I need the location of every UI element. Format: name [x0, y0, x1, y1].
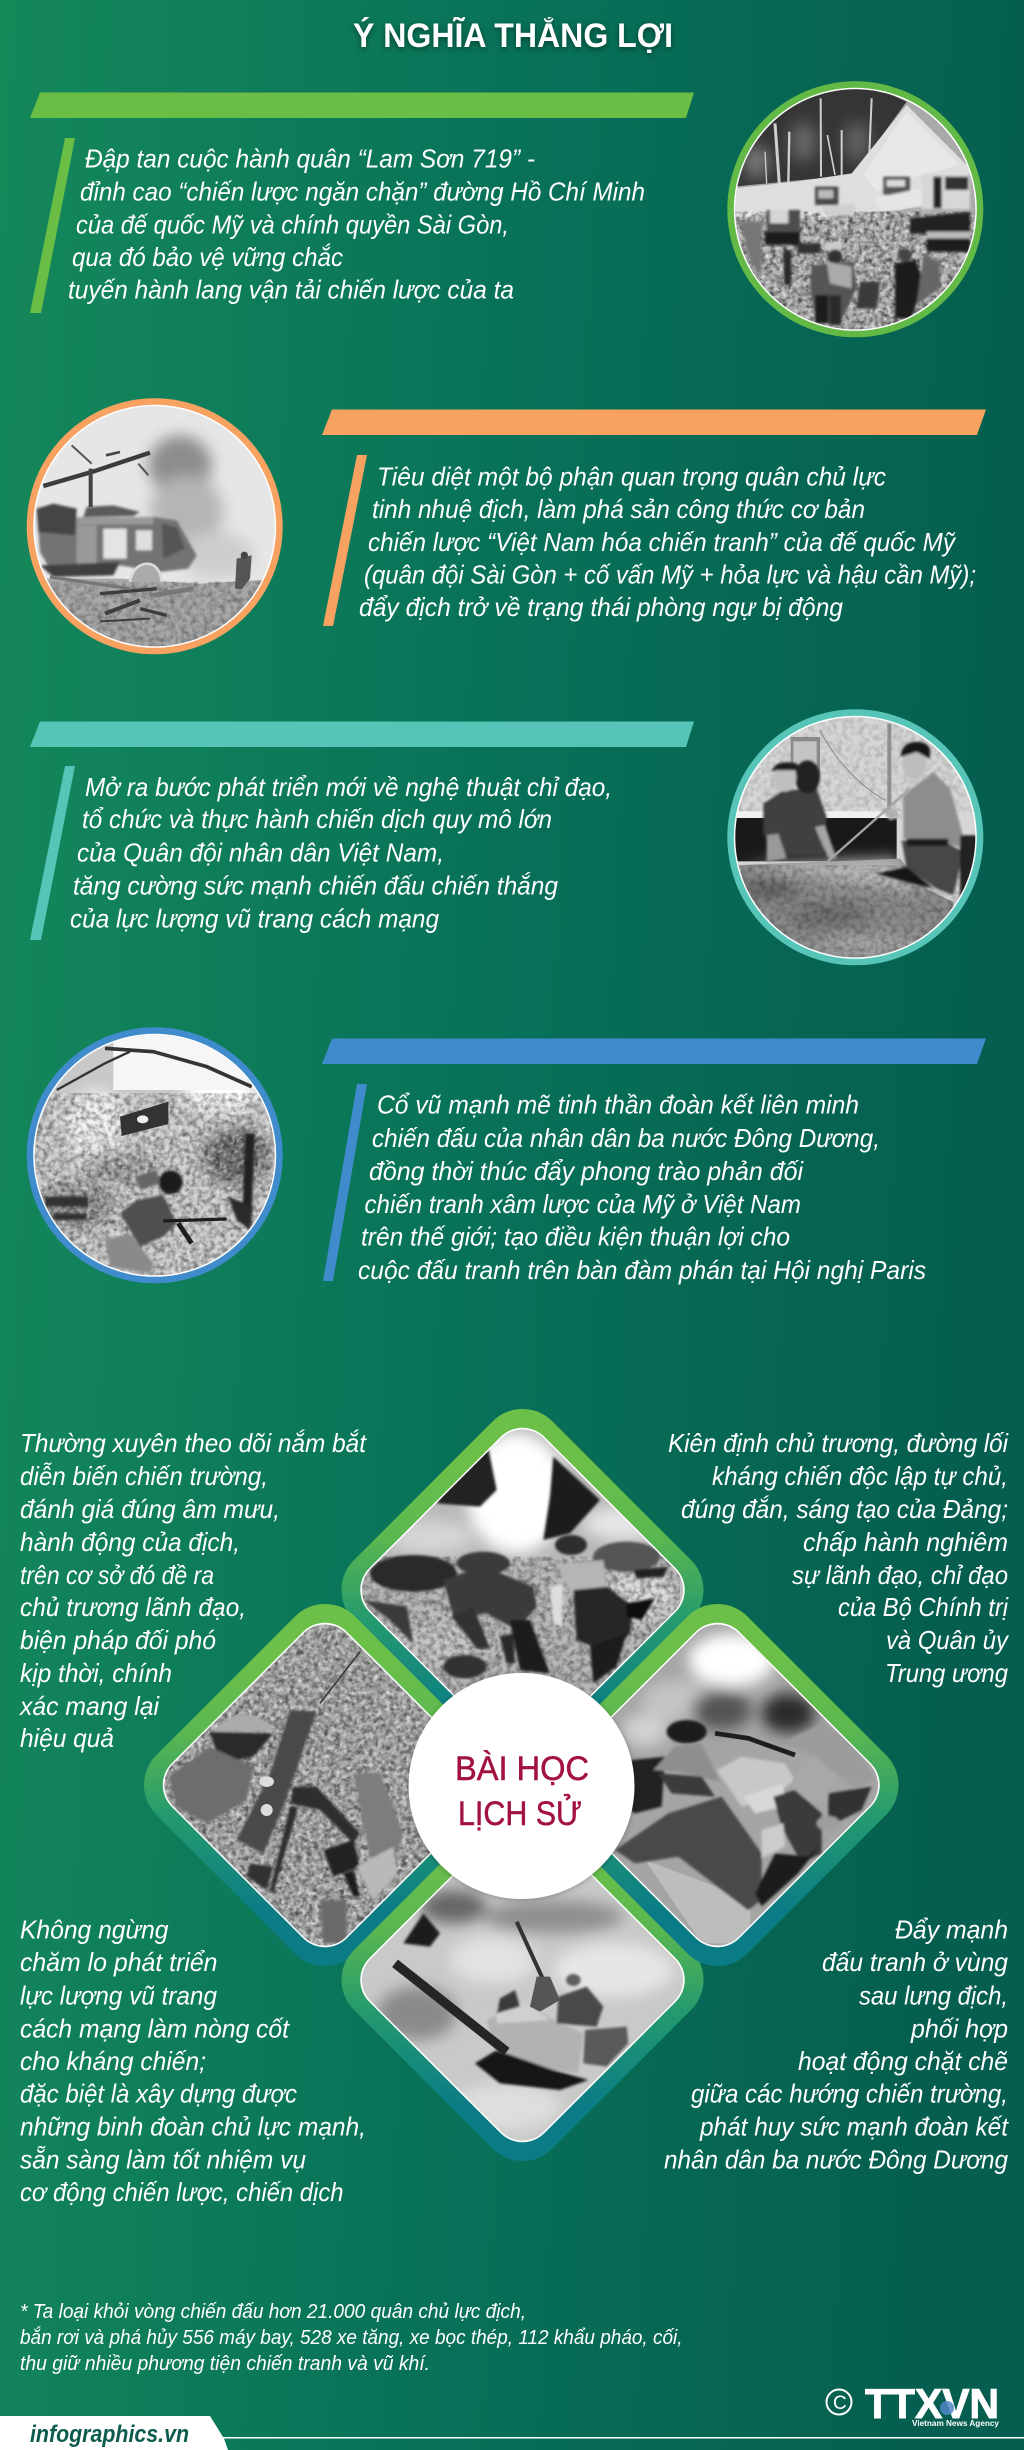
globe mark — [940, 2401, 954, 2415]
text block 1: của đế quốc Mỹ và chính quyền Sài Gòn, — [76, 210, 509, 240]
agency tagline: Vietnam News Agency — [912, 2418, 999, 2428]
text block 4: chiến tranh xâm lược của Mỹ ở Việt Nam — [364, 1189, 801, 1219]
badge heading: BÀI HỌC — [455, 1750, 589, 1788]
lesson text: top left: diễn biến chiến trường, — [20, 1461, 268, 1491]
lesson text: top right — [668, 1428, 1010, 1688]
badge heading: LỊCH SỬ — [458, 1795, 582, 1833]
diamond: right, soldiers with binoculars — [600, 1604, 898, 1966]
lesson text: top left: Thường xuyên theo dõi nắm bắt — [20, 1428, 368, 1458]
panel: historical lessons diamond cluster — [127, 1392, 916, 2178]
center circle badge — [408, 1673, 634, 1899]
footer tab: infographics.vn: infographics.vn — [30, 2421, 189, 2448]
lesson text: bottom left: sẵn sàng làm tốt nhiệm vụ — [20, 2144, 306, 2174]
panel: significance 3 (teal) — [30, 702, 990, 972]
lesson text: top right: Kiên định chủ trương, đường lối — [668, 1428, 1009, 1458]
photo circle: destroyed helicopter — [20, 392, 290, 662]
lesson text: bottom right: Đẩy mạnh — [895, 1914, 1008, 1944]
text block 3: của lực lượng vũ trang cách mạng — [70, 904, 440, 934]
TTXVN logo — [826, 2380, 999, 2428]
lesson text: bottom right: hoạt động chặt chẽ — [798, 2046, 1008, 2076]
lesson text: top left: hiệu quả — [20, 1723, 114, 1753]
lesson text: top right: kháng chiến độc lập tự chủ, — [712, 1461, 1008, 1491]
text block 3: của Quân đội nhân dân Việt Nam, — [77, 838, 444, 868]
photo circle: commanders at the map table — [720, 702, 990, 972]
lesson text: bottom right: giữa các hướng chiến trường, — [691, 2078, 1008, 2108]
footnote: * Ta loại khỏi vòng chiến đấu hơn 21.000 quân chủ lực địch, — [20, 2301, 526, 2323]
text block 2: đẩy địch trở về trạng thái phòng ngự bị động — [359, 592, 843, 622]
text block 4: Cổ vũ mạnh mẽ tinh thần đoàn kết liên minh — [377, 1090, 859, 1120]
text block 1 — [68, 144, 645, 304]
orange slanted rule — [323, 455, 367, 626]
photo circle: soldier in the jungle with flag — [20, 1020, 290, 1290]
green heading bar — [30, 92, 694, 118]
teal heading bar — [30, 722, 694, 747]
blue heading bar — [322, 1038, 986, 1064]
lesson text: top left: đánh giá đúng âm mưu, — [20, 1494, 280, 1524]
text block 2: Tiêu diệt một bộ phận quan trọng quân chủ lực — [377, 462, 886, 492]
text block 1: Đập tan cuộc hành quân “Lam Sơn 719” - — [85, 144, 535, 174]
lesson text: bottom left — [20, 1914, 366, 2207]
lesson text: bottom left: những binh đoàn chủ lực mạnh, — [20, 2112, 366, 2142]
text block 4: trên thế giới; tạo điều kiện thuận lợi cho — [361, 1222, 790, 1252]
footnote — [20, 2301, 682, 2375]
text block 3: tổ chức và thực hành chiến dịch quy mô lớn — [82, 804, 552, 834]
lesson text: top right: của Bộ Chính trị — [838, 1592, 1009, 1622]
orange heading bar — [322, 410, 986, 435]
lesson text: top left: kịp thời, chính — [20, 1658, 172, 1688]
lesson text: bottom left: lực lượng vũ trang — [20, 1980, 217, 2010]
text block 3: tăng cường sức mạnh chiến đấu chiến thắng — [73, 870, 559, 900]
diamond: top, assault under explosions — [342, 1409, 704, 1704]
lesson text: top right: và Quân ủy — [886, 1625, 1010, 1655]
lesson text: bottom right: nhân dân ba nước Đông Dương — [664, 2144, 1008, 2174]
lesson text: bottom left: cách mạng làm nòng cốt — [20, 2014, 291, 2044]
lesson text: bottom left: chăm lo phát triển — [20, 1947, 218, 1977]
diamond: bottom, tank with anti-aircraft gun — [342, 1864, 704, 2161]
lesson text: top left: biện pháp đối phó — [20, 1625, 216, 1655]
text block 4: đồng thời thúc đẩy phong trào phản đối — [369, 1156, 804, 1186]
lesson text: top right: chấp hành nghiêm — [803, 1527, 1008, 1557]
copyright symbol: C — [833, 2393, 847, 2414]
text block 1: tuyến hành lang vận tải chiến lược của ta — [68, 274, 514, 304]
footer tab: infographics.vn — [0, 2416, 1024, 2450]
text block 4: chiến đấu của nhân dân ba nước Đông Dương, — [372, 1123, 880, 1153]
lesson text: bottom left: cơ động chiến lược, chiến dịch — [20, 2177, 344, 2207]
lesson text: bottom left: đặc biệt là xây dựng được — [20, 2078, 297, 2108]
copyright symbol — [826, 2390, 852, 2414]
diamond: left, mortar crew — [144, 1604, 443, 1966]
lesson text: bottom right: phối hợp — [910, 2014, 1008, 2044]
lesson text: bottom right — [664, 1914, 1010, 2174]
text block 2: (quân đội Sài Gòn + cố vấn Mỹ + hỏa lực và hậu cần Mỹ); — [364, 560, 976, 590]
lesson text: bottom right: sau lưng địch, — [859, 1980, 1008, 2010]
lesson text: bottom left: Không ngừng — [20, 1914, 169, 1944]
lesson text: top right: sự lãnh đạo, chỉ đạo — [792, 1560, 1008, 1590]
text block 2: chiến lược “Việt Nam hóa chiến tranh” của đế quốc Mỹ — [368, 527, 957, 557]
text block 4 — [358, 1090, 926, 1285]
lesson text: bottom left: cho kháng chiến; — [20, 2046, 206, 2076]
lesson text: top right: đúng đắn, sáng tạo của Đảng; — [681, 1494, 1008, 1524]
panel: significance 4 (blue) — [20, 1020, 986, 1290]
text block 2 — [359, 462, 976, 622]
text block 1: đỉnh cao “chiến lược ngăn chặn” đường Hồ Chí Minh — [80, 176, 645, 206]
footnote: thu giữ nhiều phương tiện chiến tranh và vũ khí. — [20, 2353, 430, 2375]
lesson text: top left: trên cơ sở đó đề ra — [20, 1560, 214, 1590]
lesson text: top right: Trung ương — [885, 1658, 1008, 1688]
TTXVN wordmark: TTXVN — [865, 2380, 999, 2427]
text block 3 — [70, 772, 612, 934]
text block 1: qua đó bảo vệ vững chắc — [72, 242, 343, 272]
photo circle: road construction with bulldozers — [720, 75, 990, 345]
title: Ý NGHĨA THẮNG LỢI — [353, 17, 673, 55]
panel: significance 2 (orange) — [20, 392, 986, 662]
green slanted rule — [30, 138, 75, 313]
text block 3: Mở ra bước phát triển mới về nghệ thuật chỉ đạo, — [85, 772, 612, 802]
text block 2: tinh nhuệ địch, làm phá sản công thức cơ bản — [372, 494, 865, 524]
text block 4: cuộc đấu tranh trên bàn đàm phán tại Hội nghị Paris — [358, 1255, 926, 1285]
lesson text: top left: hành động của địch, — [20, 1527, 240, 1557]
lesson text: bottom right: phát huy sức mạnh đoàn kết — [699, 2112, 1010, 2142]
teal slanted rule — [30, 766, 75, 940]
blue slanted rule — [323, 1084, 367, 1281]
lesson text: top left: chủ trương lãnh đạo, — [20, 1592, 246, 1622]
lesson text: top left — [18, 1428, 368, 1753]
lesson text: top left: xác mang lại — [18, 1691, 160, 1721]
panel: significance 1 (green) — [30, 75, 990, 345]
footnote: bắn rơi và phá hủy 556 máy bay, 528 xe tăng, xe bọc thép, 112 khẩu pháo, cối, — [20, 2326, 682, 2349]
lesson text: bottom right: đấu tranh ở vùng — [822, 1947, 1008, 1977]
